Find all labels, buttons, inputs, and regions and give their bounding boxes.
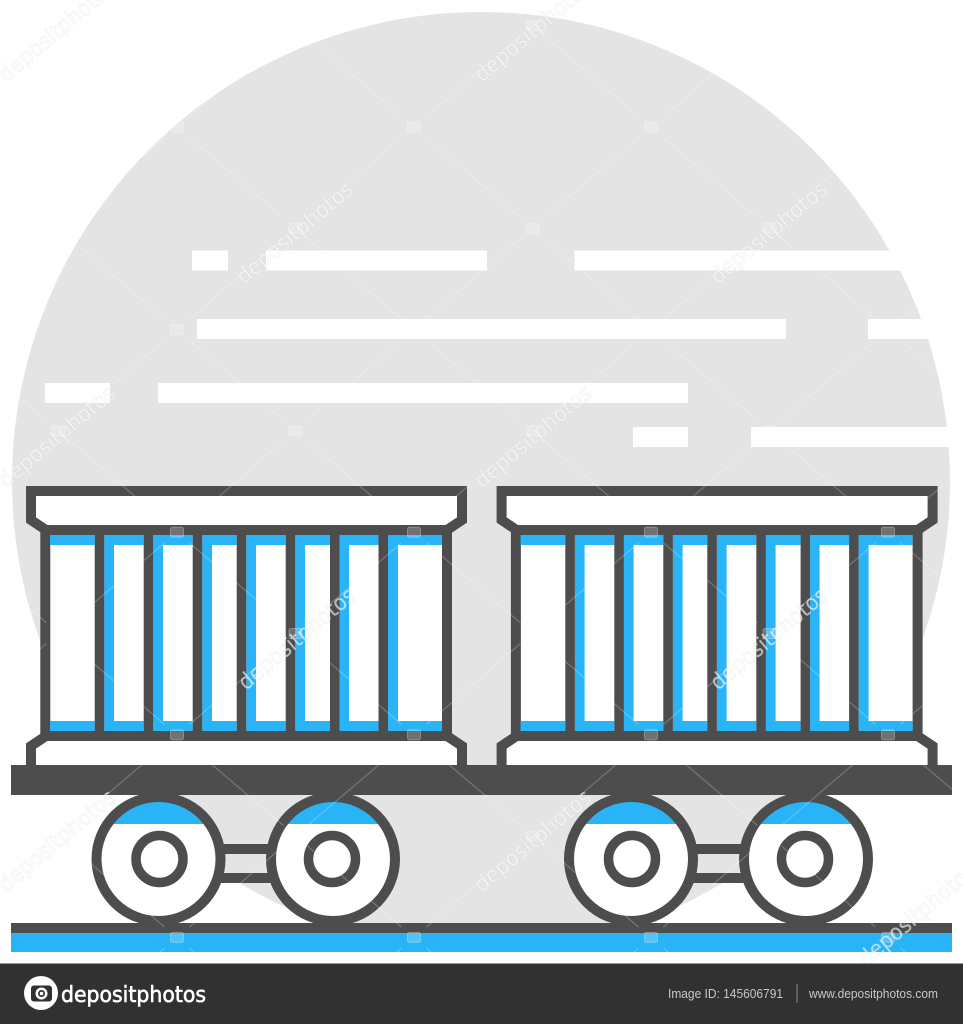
wagon: right [502,491,933,770]
dark slat bars [565,535,859,731]
watermark text: depositphotos [234,583,361,696]
wheel [569,797,693,921]
wheel [744,797,868,921]
wagon bottom rim [502,736,933,770]
wagon platform [11,765,952,795]
watermark text: depositphotos [706,583,833,696]
axle connector [693,849,745,878]
logo wordmark: depositphotos [61,983,206,1008]
wheel [96,797,220,921]
watermark text: depositphotos [470,381,597,494]
wagon top rim [31,491,462,530]
icon: camera logo [24,976,58,1010]
speed lines [45,250,956,447]
wagon: left [31,491,462,770]
dark slat bars [95,535,388,731]
wheel set: left [96,797,395,921]
watermark text: depositphotos [232,177,359,290]
footer bar [0,964,963,1024]
wagon top rim [502,491,933,530]
website url: www.depositphotos.com [808,987,938,1001]
axle connector [220,849,272,878]
watermark text: depositphotos [470,785,597,898]
rail track [11,923,952,952]
image id: Image ID: 145606791 [668,987,783,1001]
footer divider [796,984,798,1003]
blue slat accents [521,535,913,731]
watermark text: depositphotos [706,177,833,290]
wheel set: right [569,797,868,921]
blue slat accents [50,535,442,731]
wheel [271,797,395,921]
wagon body [45,530,447,736]
wagon bottom rim [31,736,462,770]
wagon body [516,530,918,736]
